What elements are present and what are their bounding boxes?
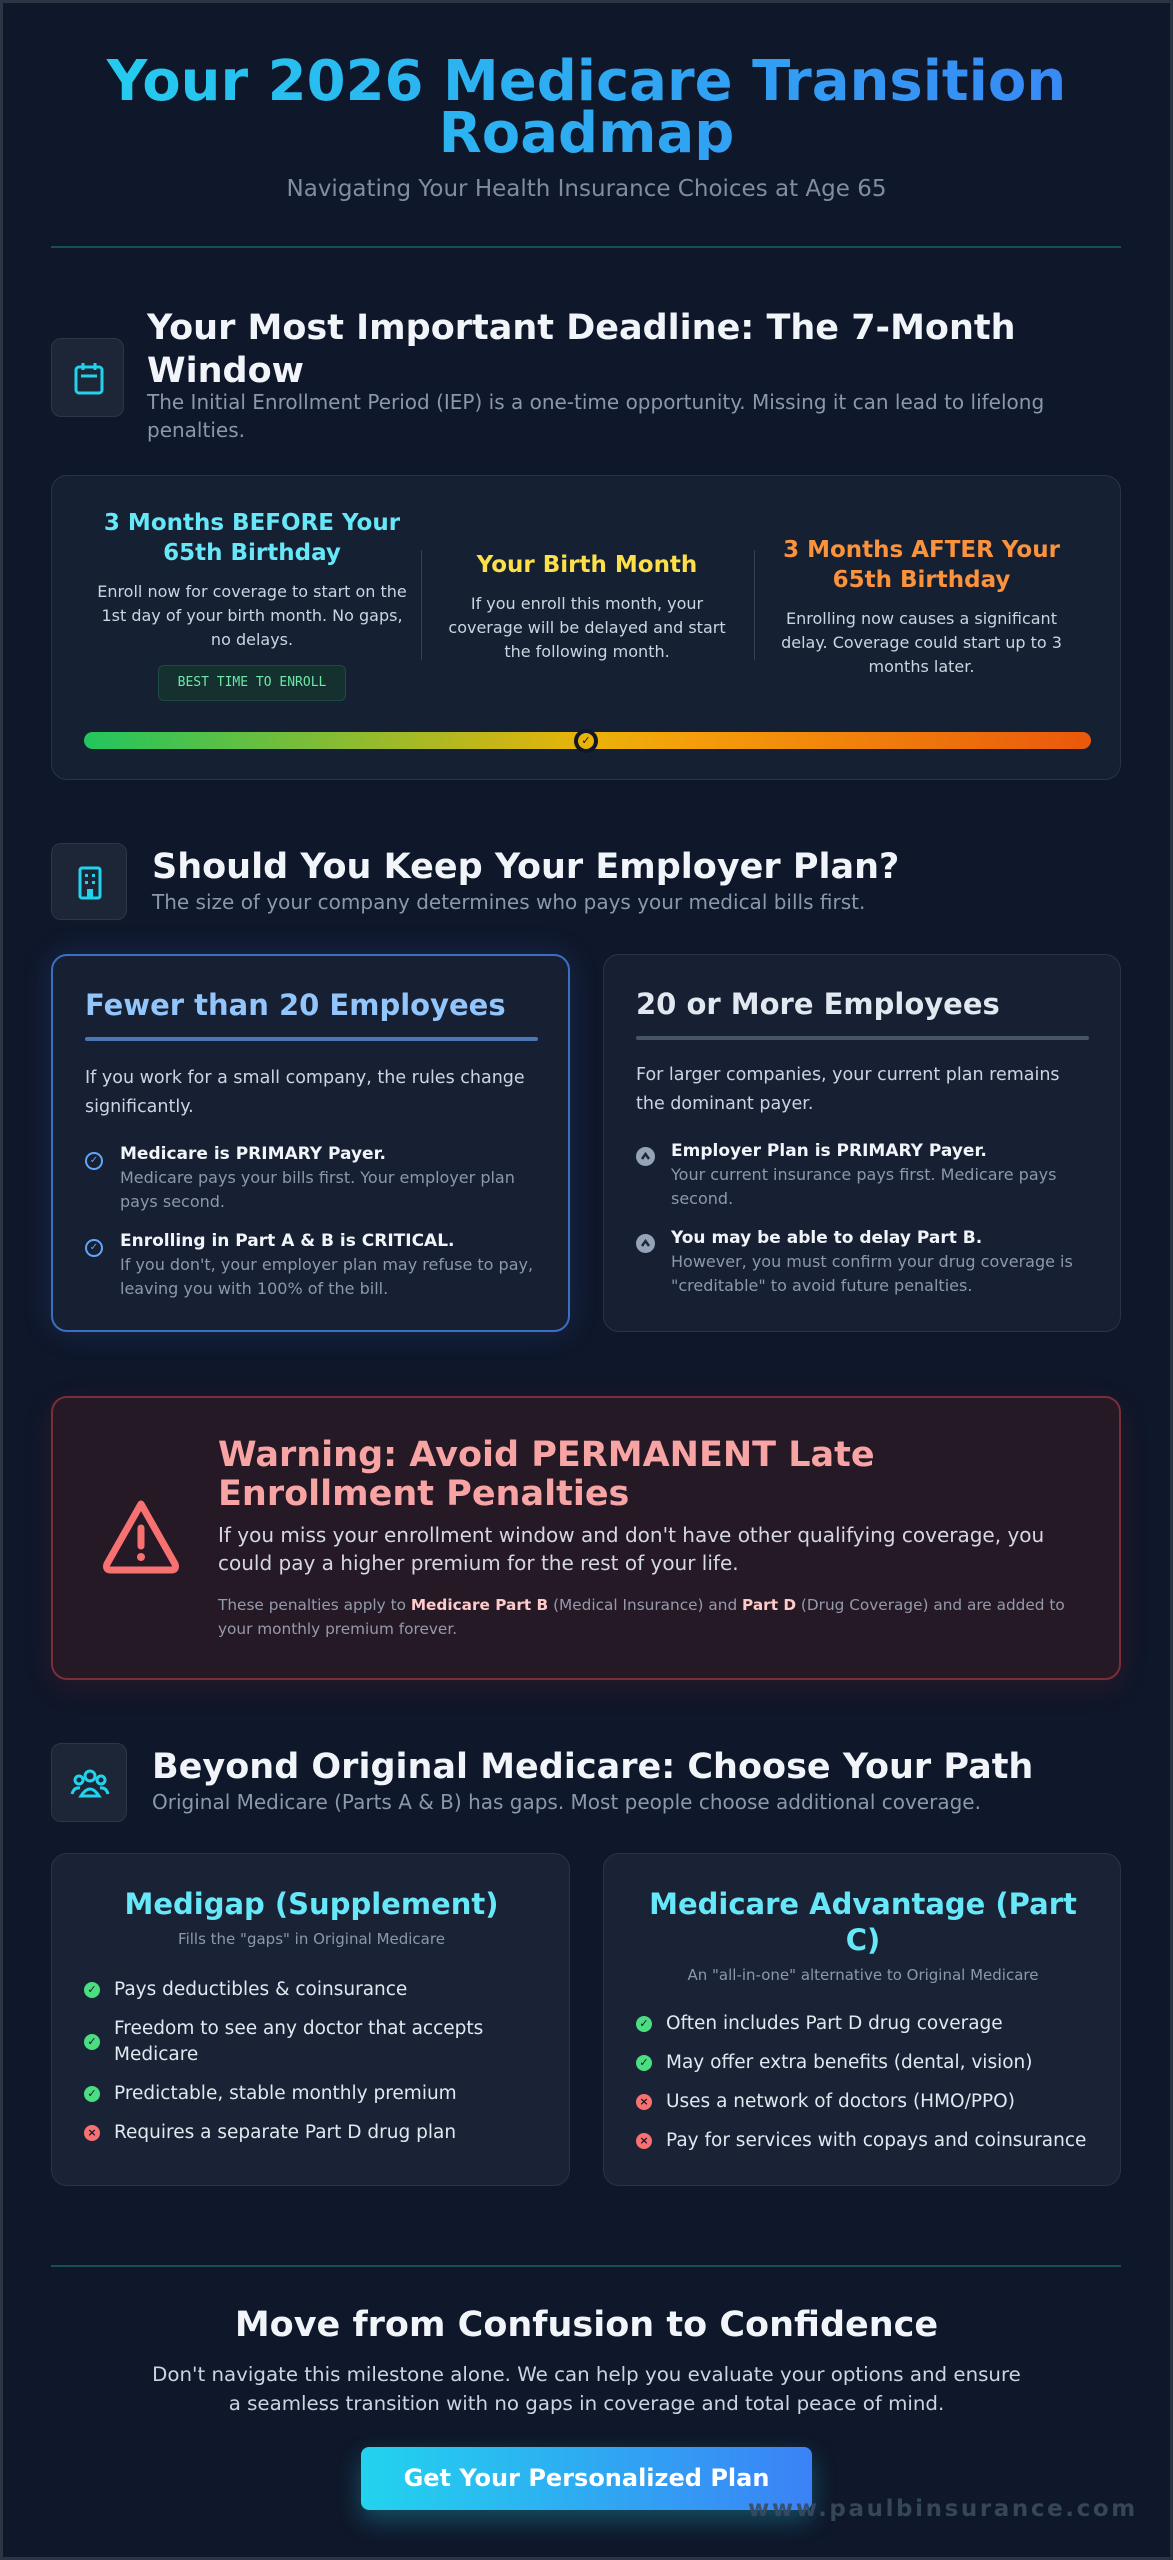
panel: medigap: ✓ bbox=[87, 1983, 97, 1996]
bullet: medicare primary bbox=[85, 1144, 515, 1211]
bullet: enrolling critical bbox=[85, 1231, 533, 1298]
column: before: Enroll now for coverage to start on the 1st day of your birth month. No gaps, no delays. bbox=[97, 582, 407, 649]
panel: medicare advantage bbox=[603, 1853, 1121, 2186]
bullet: delay part B: You may be able to delay Part B. bbox=[671, 1228, 982, 1248]
list: medigap features bbox=[84, 1979, 483, 2143]
panel: 20 or more bbox=[603, 954, 1121, 1332]
badge: best time bbox=[158, 665, 346, 701]
panel: medicare advantage: × bbox=[639, 2134, 649, 2147]
panel: medigap: × bbox=[87, 2126, 97, 2139]
text: IEP description: The Initial Enrollment Period (IEP) is a one-time opportunity. Missing it can lead to lifelong penalties. bbox=[147, 390, 1044, 442]
panel: medigap: Predictable, stable monthly premium bbox=[114, 2083, 457, 2104]
icon: warning triangle bbox=[103, 1500, 179, 1574]
bullet: delay part B: However, you must confirm your drug coverage is "creditable" to avoid future penalties. bbox=[671, 1252, 1073, 1295]
panel: medicare advantage: ✓ bbox=[639, 2017, 649, 2030]
panel: medigap: Freedom to see any doctor that accepts Medicare bbox=[114, 2018, 483, 2065]
icon: people bbox=[51, 1743, 127, 1822]
marker: ✓ bbox=[581, 734, 591, 747]
column: birth month: Your Birth Month bbox=[477, 552, 697, 578]
column: after: 3 Months AFTER Your 65th Birthday bbox=[783, 537, 1060, 593]
icon: building bbox=[51, 843, 127, 920]
panel: medicare advantage: × bbox=[639, 2095, 649, 2108]
panel: medigap: ✓ bbox=[87, 2035, 97, 2048]
text: employer subtitle: The size of your company determines who pays your medical bills first. bbox=[152, 890, 865, 914]
panel: fewer than 20: If you work for a small company, the rules change significantly. bbox=[85, 1068, 525, 1117]
heading: warning: Warning: Avoid PERMANENT Late Enrollment Penalties bbox=[218, 1435, 875, 1514]
watermark: www.paulbinsurance.com bbox=[748, 2496, 1138, 2522]
panel: medicare advantage: Often includes Part D drug coverage bbox=[666, 2013, 1003, 2034]
panel: medigap bbox=[51, 1853, 570, 2186]
heading: employer plan: Should You Keep Your Employer Plan? bbox=[152, 847, 899, 887]
bullet: employer primary bbox=[636, 1141, 1056, 1208]
panel: fewer than 20: Fewer than 20 Employees bbox=[85, 988, 506, 1022]
column: before bbox=[97, 510, 407, 649]
panel: warning bbox=[51, 1396, 1121, 1680]
panel: fewer than 20 bbox=[51, 954, 570, 1332]
panel: medigap: Fills the "gaps" in Original Medicare bbox=[178, 1930, 445, 1948]
panel: medigap: Medigap (Supplement) bbox=[124, 1887, 498, 1921]
panel: medicare advantage: Medicare Advantage (Part C) bbox=[649, 1887, 1077, 1957]
bullet: medicare primary: ✓ bbox=[90, 1155, 98, 1166]
subtitle: Navigating Your Health Insurance Choices at Age 65 bbox=[287, 176, 886, 202]
bullet: enrolling critical: If you don't, your employer plan may refuse to pay, leaving you with 100% of the bill. bbox=[120, 1255, 533, 1298]
button: cta: Get Your Personalized Plan bbox=[404, 2464, 769, 2492]
panel: medicare advantage: ✓ bbox=[639, 2056, 649, 2069]
bullet: medicare primary: Medicare pays your bills first. Your employer plan pays second. bbox=[120, 1168, 515, 1211]
column: after bbox=[781, 537, 1062, 676]
heading: cta: Move from Confusion to Confidence bbox=[235, 2305, 938, 2345]
bullet: medicare primary: Medicare is PRIMARY Payer. bbox=[120, 1144, 386, 1164]
column: before: 3 Months BEFORE Your 65th Birthday bbox=[104, 510, 400, 566]
column: birth month: If you enroll this month, your coverage will be delayed and start the following month. bbox=[448, 594, 726, 661]
panel: medigap: Requires a separate Part D drug plan bbox=[114, 2122, 456, 2143]
panel: 20 or more: 20 or More Employees bbox=[636, 987, 1000, 1021]
bullet: enrolling critical: Enrolling in Part A & B is CRITICAL. bbox=[120, 1231, 454, 1251]
panel: medicare advantage: Pay for services with copays and coinsurance bbox=[666, 2130, 1086, 2151]
heading: beyond original medicare: Beyond Original Medicare: Choose Your Path bbox=[152, 1747, 1033, 1787]
panel: medigap: Pays deductibles & coinsurance bbox=[114, 1979, 407, 2000]
icon: calendar bbox=[51, 338, 124, 417]
button: cta bbox=[361, 2447, 812, 2510]
marker bbox=[574, 729, 598, 753]
title: Your 2026 Medicare Transition Roadmap bbox=[107, 49, 1066, 166]
panel: medicare advantage: An "all-in-one" alternative to Original Medicare bbox=[688, 1966, 1038, 1984]
panel: timeline bbox=[51, 475, 1121, 780]
text: warning body: If you miss your enrollment window and don't have other qualifying coverage, you could pay a higher premium for the rest of your life. bbox=[218, 1523, 1044, 1575]
text: warning note: These penalties apply to Medicare Part B (Medical Insurance) and Part D (Drug Coverage) and are added to your monthly premium forever. bbox=[218, 1596, 1065, 1638]
column: birth month bbox=[448, 552, 726, 661]
panel: medigap: ✓ bbox=[87, 2087, 97, 2100]
list: advantage features bbox=[636, 2013, 1086, 2151]
panel: 20 or more: For larger companies, your current plan remains the dominant payer. bbox=[636, 1065, 1060, 1114]
bullet: enrolling critical: ✓ bbox=[90, 1242, 98, 1253]
panel: medicare advantage: Uses a network of doctors (HMO/PPO) bbox=[666, 2091, 1015, 2112]
bar: timeline gradient bbox=[84, 732, 1091, 749]
bullet: delay part B bbox=[636, 1228, 1073, 1295]
text: cta body: Don't navigate this milestone alone. We can help you evaluate your options and ensure a seamless transition with no gaps in coverage and total peace of mind. bbox=[152, 2363, 1021, 2415]
bullet: employer primary: Your current insurance pays first. Medicare pays second. bbox=[671, 1165, 1056, 1208]
panel: medicare advantage: May offer extra benefits (dental, vision) bbox=[666, 2052, 1032, 2073]
bullet: employer primary: Employer Plan is PRIMARY Payer. bbox=[671, 1141, 987, 1161]
badge: best time: BEST TIME TO ENROLL bbox=[178, 675, 326, 690]
text: path subtitle: Original Medicare (Parts A & B) has gaps. Most people choose additional coverage. bbox=[152, 1790, 981, 1814]
column: after: Enrolling now causes a significant delay. Coverage could start up to 3 months later. bbox=[781, 609, 1062, 676]
heading: 7-month window: Your Most Important Deadline: The 7-Month Window bbox=[147, 308, 1016, 391]
